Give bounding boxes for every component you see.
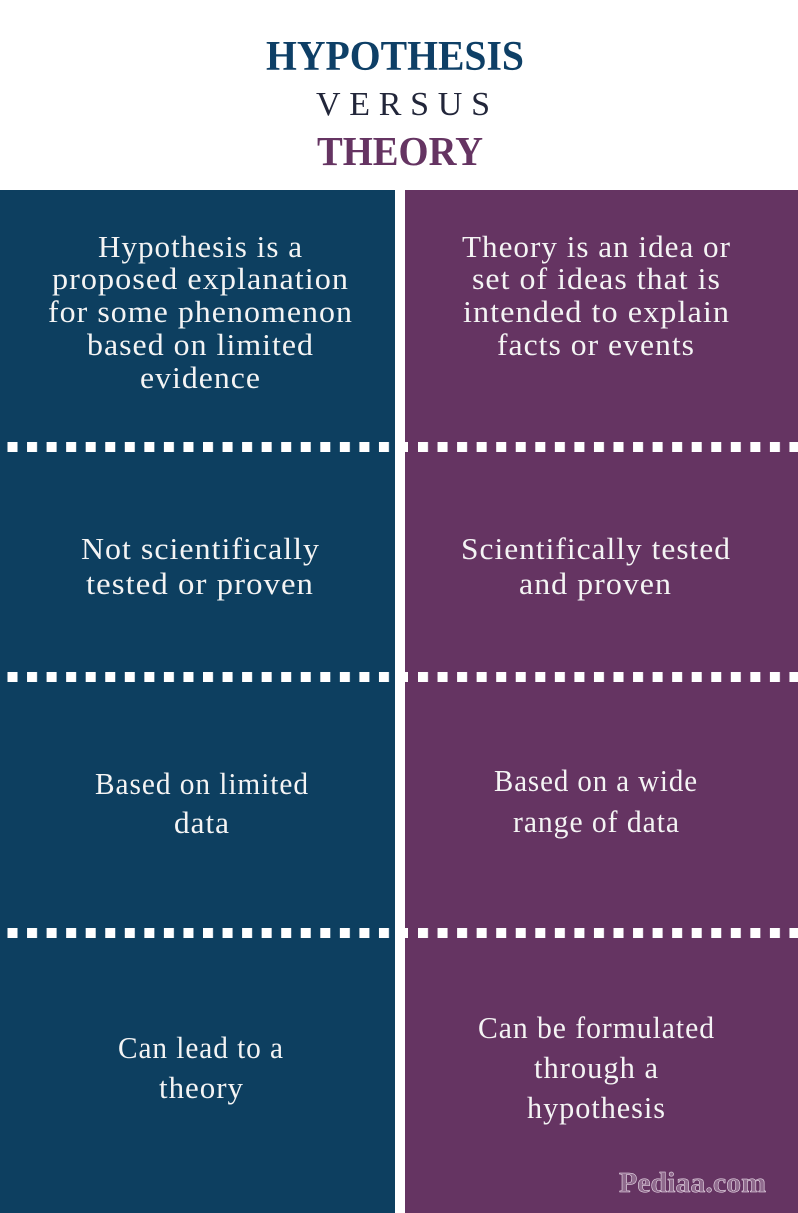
text: hypothesis outcome: Can lead to a [118, 1030, 284, 1065]
heading: versus: VERSUS [316, 86, 490, 123]
heading: Theory: THEORY [317, 128, 483, 174]
text: theory definition: Theory is an idea or [462, 229, 731, 264]
divider row 2 left [0, 672, 392, 682]
text: theory testing: and proven [519, 566, 672, 601]
text: theory definition: set of ideas that is [472, 261, 721, 296]
text: hypothesis data: Based on limited [95, 766, 309, 801]
text: hypothesis definition [48, 229, 353, 395]
text: theory definition [462, 229, 731, 362]
text: hypothesis testing: tested or proven [86, 566, 314, 601]
text: hypothesis data: data [174, 805, 230, 840]
text: theory origin: hypothesis [527, 1090, 666, 1125]
text: hypothesis definition: evidence [140, 360, 261, 395]
text: hypothesis outcome [118, 1030, 284, 1105]
logo: Pediaa.com: Pediaa.com [619, 1167, 766, 1199]
text: theory definition: facts or events [497, 327, 695, 362]
divider row 3 left [0, 928, 392, 938]
text: hypothesis data [95, 766, 309, 840]
text: theory data: Based on a wide [494, 763, 698, 798]
divider row 2 right [405, 672, 798, 682]
heading: Hypothesis: HYPOTHESIS [266, 34, 524, 80]
text: theory origin: Can be formulated [478, 1010, 715, 1045]
panel: theory column [405, 190, 798, 1213]
text: theory data [494, 763, 698, 839]
text: hypothesis definition: for some phenomenon [48, 294, 353, 329]
text: theory definition: intended to explain [463, 294, 730, 329]
text: hypothesis testing: Not scientifically [81, 531, 320, 566]
text: theory testing: Scientifically tested [461, 531, 731, 566]
panel: hypothesis column [0, 190, 395, 1213]
divider row 3 right [405, 928, 798, 938]
divider row 1 left [0, 442, 392, 452]
text: theory data: range of data [513, 804, 680, 839]
text: hypothesis definition: Hypothesis is a [98, 229, 303, 264]
text: hypothesis definition: based on limited [87, 327, 314, 362]
divider row 1 right [405, 442, 798, 452]
text: theory origin [478, 1010, 715, 1125]
text: hypothesis definition: proposed explanation [52, 261, 349, 296]
title [266, 34, 524, 174]
text: hypothesis outcome: theory [159, 1070, 244, 1105]
text: theory testing [461, 531, 731, 601]
text: hypothesis testing [81, 531, 320, 601]
text: theory origin: through a [534, 1050, 659, 1085]
